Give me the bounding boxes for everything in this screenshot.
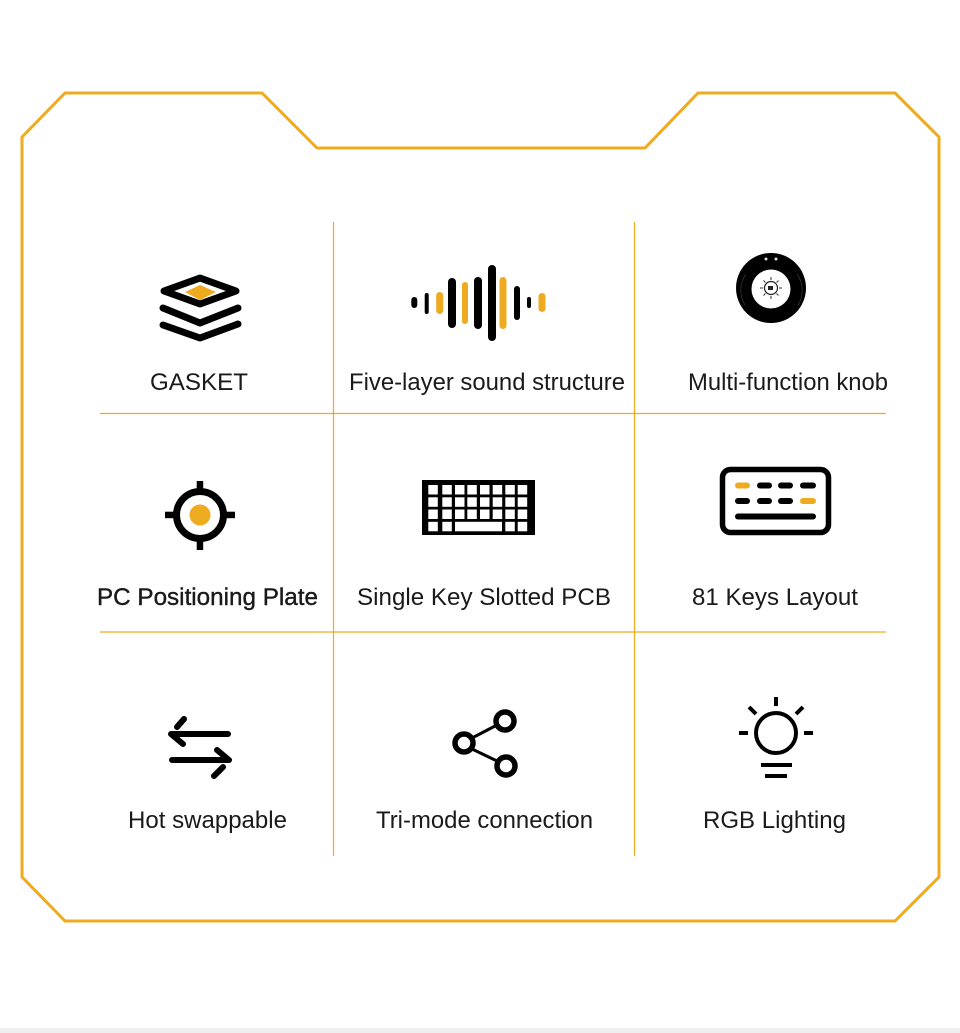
label: Multi-function knob: Multi-function knob xyxy=(688,369,888,396)
icon: slotted PCB keyboard xyxy=(422,480,535,535)
icon: positioning target xyxy=(165,481,235,550)
icon: hot swap arrows xyxy=(171,719,229,776)
label: 81 Keys Layout: 81 Keys Layout xyxy=(692,584,858,611)
icon: multi-function knob xyxy=(736,253,806,323)
icon: gasket layers xyxy=(163,278,238,338)
icon: RGB light bulb xyxy=(739,697,813,776)
icon: 81 keys layout xyxy=(722,470,828,532)
label: Five-layer sound structure: Five-layer sound structure xyxy=(349,369,625,396)
label: Hot swappable: Hot swappable xyxy=(128,807,287,834)
label: Single Key Slotted PCB: Single Key Slotted PCB xyxy=(357,584,611,611)
label: RGB Lighting: RGB Lighting xyxy=(703,807,846,834)
label: GASKET: GASKET xyxy=(150,369,248,396)
grid dividers xyxy=(100,222,886,856)
label: PC Positioning Plate: PC Positioning Plate xyxy=(97,584,318,611)
panel: notched frame xyxy=(22,93,939,921)
label: Tri-mode connection: Tri-mode connection xyxy=(376,807,593,834)
icon: sound wave xyxy=(414,269,542,337)
icon: tri-mode share nodes xyxy=(455,712,515,775)
